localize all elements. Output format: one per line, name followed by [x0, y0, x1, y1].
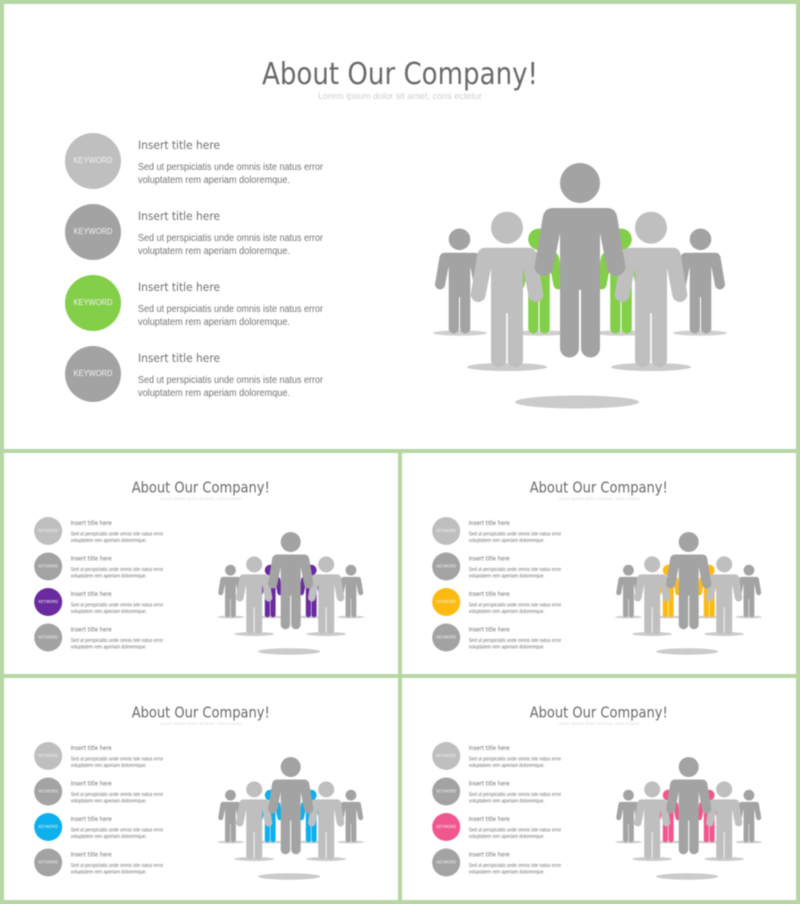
list item 4: voluptatem rem aperiam doloremque.: [71, 870, 147, 876]
list item 3: [34, 588, 163, 616]
list item 3: voluptatem rem aperiam doloremque.: [469, 834, 545, 840]
list item 4: Sed ut perspiciatis unde omnis iste natus error: [71, 863, 163, 869]
list item 3: voluptatem rem aperiam doloremque.: [138, 317, 290, 328]
list item 4: Sed ut perspiciatis unde omnis iste natus error: [138, 375, 324, 386]
list item 4: Insert title here: [138, 351, 220, 365]
list item 3: KEYWORD: [74, 297, 112, 307]
people group illustration: [217, 757, 364, 880]
list item 3: KEYWORD: [436, 599, 456, 604]
list item 4: Sed ut perspiciatis unde omnis iste natus error: [71, 638, 163, 644]
list item 2: [34, 552, 163, 580]
list item 1: Sed ut perspiciatis unde omnis iste natus error: [138, 162, 324, 173]
list item 2: [65, 204, 324, 260]
list item 2: KEYWORD: [436, 564, 456, 568]
list item 4: voluptatem rem aperiam doloremque.: [138, 388, 290, 399]
panel: pink slide: [402, 678, 796, 900]
list item 3: KEYWORD: [38, 599, 58, 604]
list item 2: Sed ut perspiciatis unde omnis iste natus error: [71, 792, 163, 798]
list item 1: voluptatem rem aperiam doloremque.: [469, 763, 545, 769]
list item 4: [34, 848, 163, 876]
list item 2: Insert title here: [71, 556, 112, 562]
list item 4: Insert title here: [469, 628, 510, 634]
list item 2: Sed ut perspiciatis unde omnis iste natus error: [71, 567, 163, 573]
list item 3: Sed ut perspiciatis unde omnis iste natus error: [71, 602, 163, 608]
subtitle: Lorem ipsum dolor sit amet, cons ectetur: [160, 721, 242, 727]
list item 4: KEYWORD: [38, 860, 58, 864]
list item 2: Insert title here: [469, 556, 510, 562]
list item 4: [65, 346, 324, 402]
list item 1: voluptatem rem aperiam doloremque.: [138, 175, 290, 186]
list item 2: Sed ut perspiciatis unde omnis iste natus error: [469, 567, 561, 573]
list item 3: Sed ut perspiciatis unde omnis iste natus error: [138, 304, 324, 315]
list item 1: Sed ut perspiciatis unde omnis iste natus error: [469, 756, 561, 762]
list item 1: Insert title here: [469, 746, 510, 752]
list item 2: Insert title here: [469, 782, 510, 788]
list item 2: voluptatem rem aperiam doloremque.: [138, 246, 290, 257]
list item 2: voluptatem rem aperiam doloremque.: [469, 798, 545, 804]
list item 1: voluptatem rem aperiam doloremque.: [71, 763, 147, 769]
list item 3: [432, 813, 561, 841]
list item 4: KEYWORD: [436, 860, 456, 864]
list item 4: KEYWORD: [38, 634, 58, 640]
list item 4: voluptatem rem aperiam doloremque.: [469, 870, 545, 876]
list item 3: Insert title here: [469, 817, 510, 823]
list item 3: Sed ut perspiciatis unde omnis iste natus error: [469, 602, 561, 608]
list item 3: Insert title here: [138, 280, 220, 294]
title: About Our Company!: [132, 704, 270, 722]
list item 3: KEYWORD: [38, 824, 58, 829]
list item 3: voluptatem rem aperiam doloremque.: [469, 609, 545, 615]
list item 3: Sed ut perspiciatis unde omnis iste natus error: [71, 828, 163, 834]
list item 3: Insert title here: [71, 817, 112, 823]
list item 4: Insert title here: [71, 852, 112, 858]
subtitle: Lorem ipsum dolor sit amet, cons ectetur: [558, 721, 640, 727]
list item 3: [432, 588, 561, 616]
list item 3: Sed ut perspiciatis unde omnis iste natus error: [469, 828, 561, 834]
list item 1: Insert title here: [469, 521, 510, 527]
list item 2: KEYWORD: [436, 788, 456, 794]
list item 1: Sed ut perspiciatis unde omnis iste natus error: [71, 756, 163, 762]
list item 2: [34, 778, 163, 806]
list item 2: Insert title here: [138, 209, 220, 223]
list item 3: Insert title here: [469, 592, 510, 598]
list item 2: voluptatem rem aperiam doloremque.: [71, 798, 147, 804]
list item 1: KEYWORD: [38, 753, 58, 758]
list item 4: Insert title here: [469, 852, 510, 858]
list item 1: [34, 517, 163, 545]
people group illustration: [433, 163, 727, 408]
list item 2: voluptatem rem aperiam doloremque.: [469, 574, 545, 580]
title: About Our Company!: [530, 704, 668, 722]
list item 1: voluptatem rem aperiam doloremque.: [71, 538, 147, 544]
subtitle: Lorem ipsum dolor sit amet, cons ectetur: [558, 496, 640, 502]
list item 1: KEYWORD: [74, 155, 112, 165]
list item 2: Insert title here: [71, 782, 112, 788]
list item 4: [432, 848, 561, 876]
list item 2: Sed ut perspiciatis unde omnis iste natus error: [138, 233, 324, 244]
list item 2: KEYWORD: [38, 788, 58, 794]
list item 1: Insert title here: [138, 138, 220, 152]
list item 1: [34, 742, 163, 770]
list item 1: KEYWORD: [436, 528, 456, 533]
list item 4: KEYWORD: [436, 634, 456, 640]
list item 2: KEYWORD: [38, 564, 58, 568]
list item 1: [432, 517, 561, 545]
subtitle: Lorem ipsum dolor sit amet, cons ectetur: [160, 496, 242, 502]
list item 1: Insert title here: [71, 746, 112, 752]
list item 4: [432, 624, 561, 652]
list item 1: KEYWORD: [436, 753, 456, 758]
list item 4: Insert title here: [71, 628, 112, 634]
list item 3: KEYWORD: [436, 824, 456, 829]
people group illustration: [615, 532, 762, 655]
list item 1: Sed ut perspiciatis unde omnis iste natus error: [71, 532, 163, 538]
list item 4: voluptatem rem aperiam doloremque.: [469, 644, 545, 650]
people group illustration: [217, 532, 364, 655]
list item 4: voluptatem rem aperiam doloremque.: [71, 644, 147, 650]
list item 1: voluptatem rem aperiam doloremque.: [469, 538, 545, 544]
list item 2: KEYWORD: [74, 226, 112, 236]
subtitle: Lorem ipsum dolor sit amet, cons ectetur: [318, 91, 482, 102]
list item 3: voluptatem rem aperiam doloremque.: [71, 834, 147, 840]
list item 4: Sed ut perspiciatis unde omnis iste natus error: [469, 863, 561, 869]
panel: blue slide: [4, 678, 398, 900]
panel: yellow slide: [402, 453, 796, 674]
title: About Our Company!: [132, 478, 270, 496]
list item 1: [432, 742, 561, 770]
list item 1: KEYWORD: [38, 528, 58, 533]
list item 2: Sed ut perspiciatis unde omnis iste natus error: [469, 792, 561, 798]
panel: purple slide: [4, 453, 398, 674]
list item 4: KEYWORD: [74, 368, 112, 378]
list item 3: Insert title here: [71, 592, 112, 598]
list item 2: [432, 552, 561, 580]
list item 3: [34, 813, 163, 841]
list item 4: [34, 624, 163, 652]
list item 2: voluptatem rem aperiam doloremque.: [71, 574, 147, 580]
title: About Our Company!: [262, 57, 538, 92]
list item 3: voluptatem rem aperiam doloremque.: [71, 609, 147, 615]
panel: main slide (green accent): [4, 4, 796, 449]
list item 3: [65, 275, 324, 331]
people group illustration: [615, 757, 762, 880]
list item 1: Sed ut perspiciatis unde omnis iste natus error: [469, 532, 561, 538]
list item 1: Insert title here: [71, 521, 112, 527]
list item 1: [65, 133, 324, 189]
title: About Our Company!: [530, 478, 668, 496]
list item 2: [432, 778, 561, 806]
list item 4: Sed ut perspiciatis unde omnis iste natus error: [469, 638, 561, 644]
